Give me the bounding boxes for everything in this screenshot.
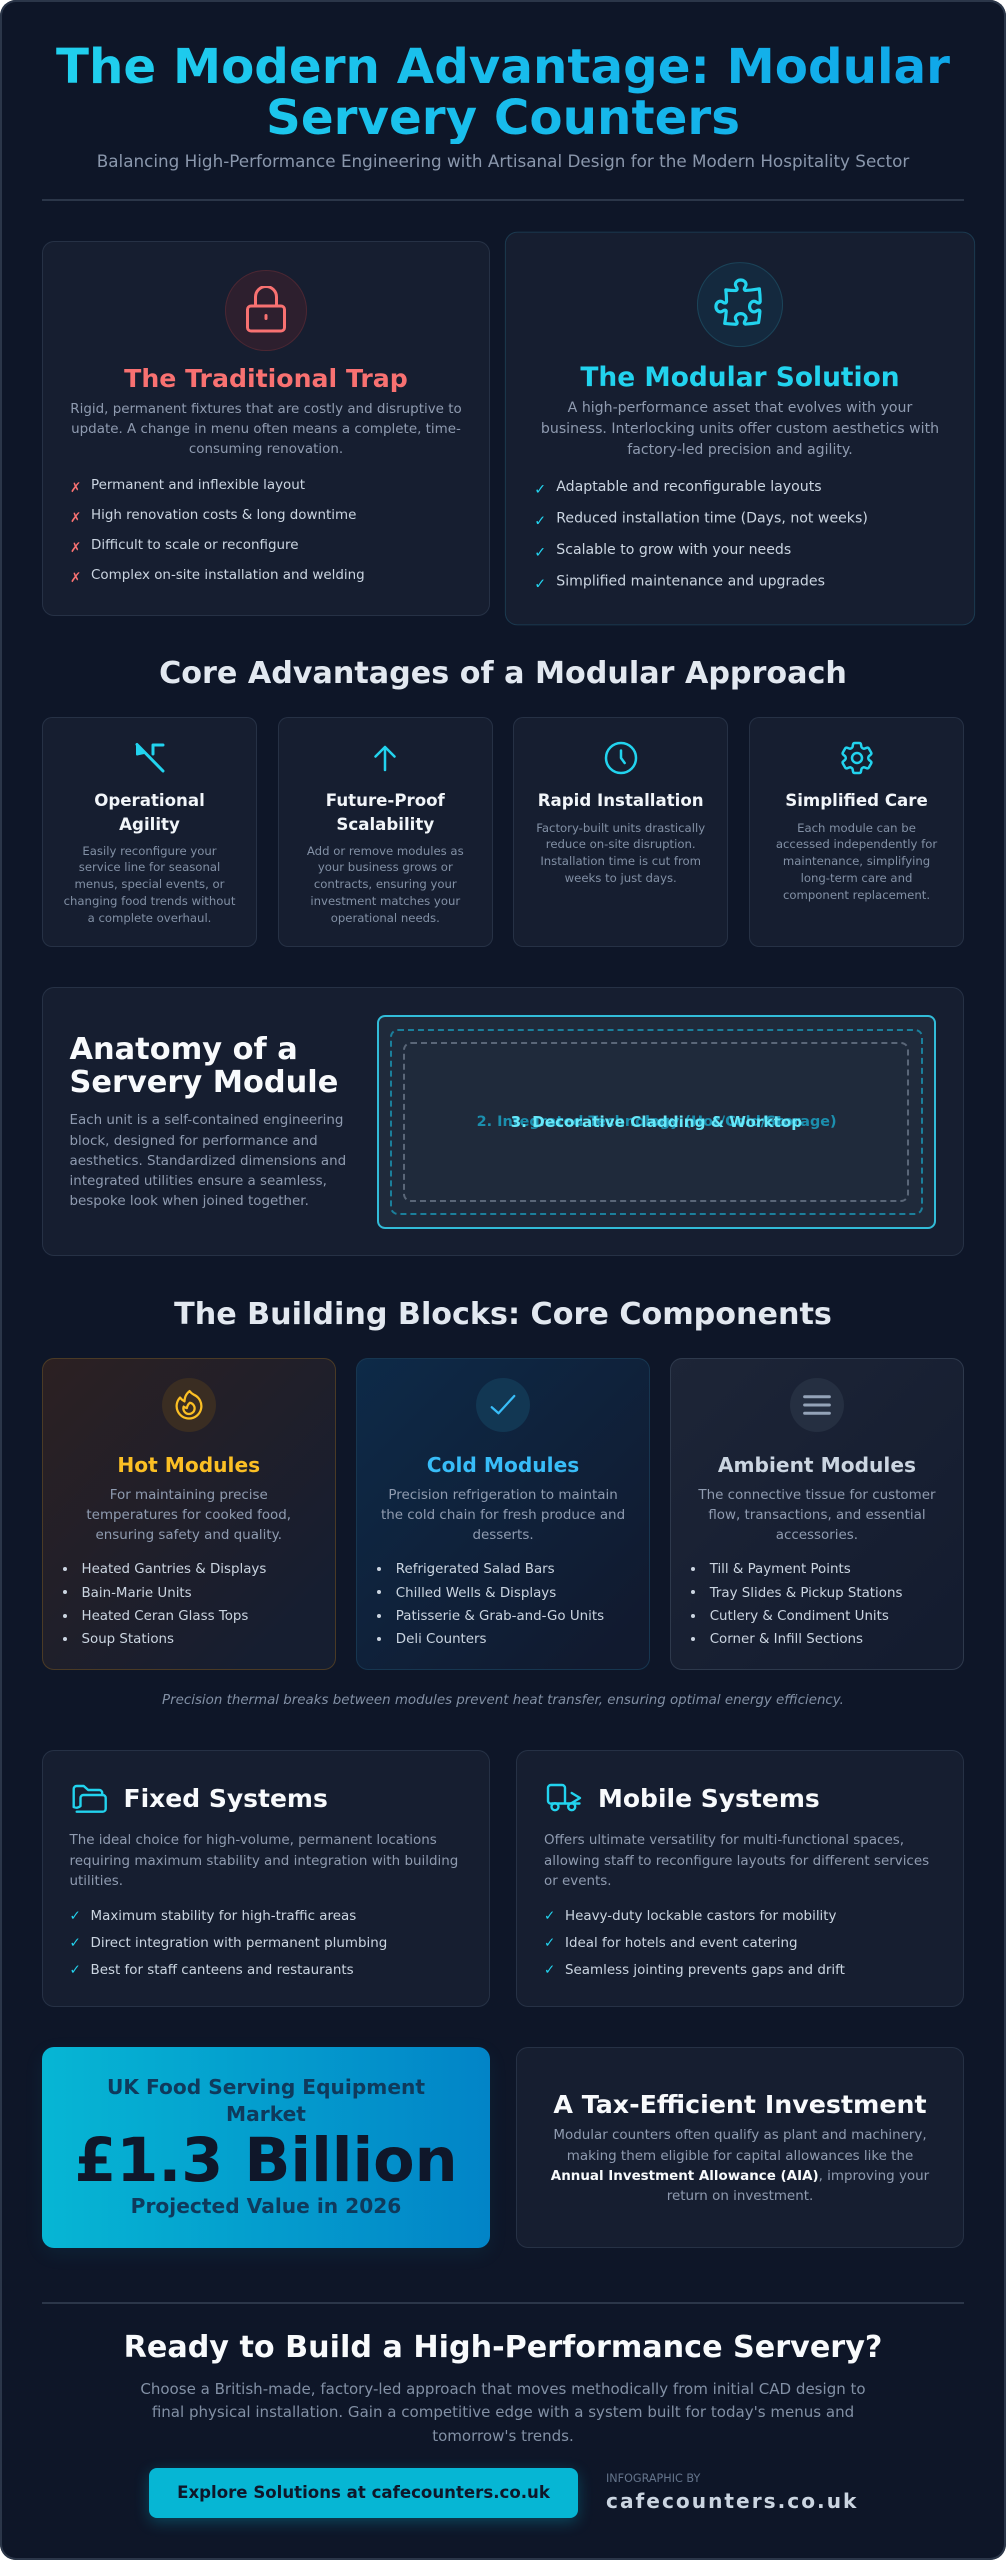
list: benefits: Simplified maintenance and upgrades — [556, 574, 825, 590]
module text: flow, transactions, and essential — [708, 1508, 926, 1523]
card text — [536, 821, 705, 885]
heading: tax: A Tax-Efficient Investment — [553, 2090, 927, 2119]
panel: tax-efficient investment — [516, 2047, 964, 2248]
description — [550, 2128, 930, 2204]
card: cold modules — [356, 1358, 650, 1670]
card: operational agility — [42, 717, 257, 947]
description: requiring maximum stability and integration with building — [70, 1854, 458, 1869]
icon: gear — [841, 742, 873, 774]
module list — [63, 1562, 266, 1647]
title: The Modern Advantage: Modular — [56, 39, 950, 95]
layer: integrated systems — [390, 1029, 923, 1215]
diagram: module layers — [377, 1015, 936, 1229]
stat caption: Projected Value in 2026 — [131, 2194, 401, 2218]
title: Servery Counters — [266, 90, 740, 146]
icon: padlock — [225, 270, 306, 351]
card text: your business grows or — [318, 860, 453, 874]
call to action text — [140, 2380, 866, 2444]
module text — [381, 1488, 625, 1543]
heading: building blocks: The Building Blocks: Core Components — [174, 1297, 832, 1332]
list: benefits: Scalable to grow with your needs — [556, 543, 791, 558]
description: Annual Investment Allowance (AIA), improving your — [551, 2169, 929, 2184]
module title: Ambient Modules — [718, 1453, 916, 1477]
credit name: cafecounters.co.uk — [606, 2488, 858, 2512]
list: fixed benefits: ✓ — [70, 1908, 81, 1924]
card: ambient modules — [670, 1358, 964, 1670]
list: mobile benefits: Ideal for hotels and event catering — [565, 1936, 798, 1951]
description: block, designed for performance and — [70, 1134, 318, 1149]
icon: up arrow — [374, 746, 396, 772]
card title — [94, 791, 205, 834]
list: fixed benefits: Direct integration with permanent plumbing — [90, 1936, 387, 1951]
icon: menu bars — [790, 1378, 844, 1432]
list: mobile benefits: ✓ — [544, 1936, 555, 1951]
module list: Corner & Infill Sections — [710, 1632, 863, 1647]
list: mobile benefits: ✓ — [544, 1908, 555, 1924]
description — [69, 1833, 458, 1889]
module text: the cold chain for fresh produce and — [381, 1508, 625, 1523]
card title: Future-Proof — [326, 791, 445, 810]
card text: reduce on-site disruption. — [546, 837, 696, 851]
card text: menus, special events, or — [75, 877, 224, 891]
card: future-proof scalability — [278, 717, 493, 947]
list: mobile benefits: ✓ — [544, 1963, 555, 1978]
card title: Scalability — [336, 815, 434, 834]
card text: Add or remove modules as — [307, 844, 464, 858]
brand credit — [606, 2472, 858, 2512]
icon: flame — [162, 1378, 216, 1432]
list: mobile benefits: Heavy-duty lockable castors for mobility — [565, 1908, 837, 1924]
description: Rigid, permanent fixtures that are costly and disruptive to — [70, 402, 462, 417]
card text: changing food trends without — [64, 894, 235, 908]
panel: mobile systems — [516, 1750, 964, 2006]
panel: the traditional trap — [42, 241, 490, 616]
heading: the traditional trap: The Traditional Trap — [124, 364, 408, 393]
subtitle: Balancing High-Performance Engineering with Artisanal Design for the Modern Hospitality Sector — [97, 151, 909, 171]
list: benefits: ✓ — [534, 514, 546, 530]
card text: maintenance, simplifying — [783, 854, 930, 868]
stat label: UK Food Serving Equipment — [107, 2075, 425, 2099]
description: aesthetics. Standardized dimensions and — [70, 1154, 346, 1169]
list: fixed benefits: ✓ — [70, 1963, 81, 1978]
title — [0, 42, 1006, 144]
module text: desserts. — [472, 1528, 534, 1543]
heading: anatomy: Anatomy of a — [70, 1032, 298, 1067]
module title: Cold Modules — [427, 1453, 579, 1477]
card text: Each module can be — [797, 821, 916, 835]
list: drawbacks: Permanent and inflexible layout — [91, 478, 305, 493]
card text: Installation time is cut from — [540, 854, 701, 868]
module text: The connective tissue for customer — [698, 1488, 936, 1503]
list: benefits: Reduced installation time (Days, not weeks) — [556, 511, 868, 527]
note: thermal breaks: Precision thermal breaks between modules prevent heat transfer, ensuring optimal energy efficiency. — [162, 1692, 844, 1708]
stat value: £1.3 Billion — [74, 2126, 458, 2196]
card title: Operational — [94, 791, 205, 810]
module list: Chilled Wells & Displays — [396, 1586, 556, 1601]
icon: check — [476, 1378, 530, 1432]
description: update. A change in menu often means a complete, time- — [71, 422, 461, 437]
heading: anatomy: Servery Module — [70, 1065, 338, 1100]
card text: Factory-built units drastically — [536, 821, 705, 835]
module list: Heated Gantries & Displays — [82, 1562, 266, 1577]
module list: Tray Slides & Pickup Stations — [710, 1586, 902, 1601]
module text: accessories. — [776, 1528, 858, 1543]
card text: contracts, ensuring your — [314, 877, 457, 891]
module title: Hot Modules — [117, 1453, 260, 1477]
description: business. Interlocking units offer custom aesthetics with — [541, 422, 939, 437]
icon: wheeled truck — [546, 1784, 582, 1812]
description — [70, 402, 462, 457]
description: Each unit is a self-contained engineering — [70, 1113, 343, 1128]
module text — [86, 1488, 291, 1543]
list: fixed benefits — [70, 1908, 387, 1978]
call to action text: Choose a British-made, factory-led approach that moves methodically from initial CAD design to — [140, 2380, 866, 2398]
call to action text: final physical installation. Gain a competitive edge with a system built for today's menus and — [152, 2403, 854, 2421]
module list: Refrigerated Salad Bars — [396, 1562, 555, 1577]
call to action text: tomorrow's trends. — [432, 2426, 574, 2444]
description — [70, 1113, 346, 1209]
stat label: Market — [226, 2102, 306, 2126]
credit label: INFOGRAPHIC BY — [606, 2472, 700, 2485]
card text — [307, 844, 464, 925]
description: making them eligible for capital allowances like the — [567, 2148, 913, 2164]
description — [541, 400, 939, 459]
stat card: market value — [42, 2047, 490, 2248]
module list: Cutlery & Condiment Units — [710, 1609, 889, 1624]
list: drawbacks: ✗ — [70, 481, 81, 496]
panel: fixed systems — [42, 1750, 490, 2006]
card: hot modules — [42, 1358, 336, 1670]
list: fixed benefits: Best for staff canteens and restaurants — [90, 1963, 354, 1978]
list: drawbacks: Difficult to scale or reconfigure — [91, 538, 299, 553]
module list — [691, 1562, 902, 1647]
list: drawbacks: ✗ — [70, 571, 81, 586]
card text: investment matches your — [310, 894, 460, 908]
list: benefits: Adaptable and reconfigurable layouts — [556, 479, 822, 495]
module list: Till & Payment Points — [710, 1562, 851, 1577]
label: layer 2: 2. Integrated Technology (Hot/Cold/Storage) — [477, 1114, 837, 1130]
list: benefits: ✓ — [534, 546, 546, 562]
list: drawbacks: Complex on-site installation and welding — [91, 568, 365, 583]
button: explore solutions: Explore Solutions at cafecounters.co.uk — [177, 2483, 550, 2502]
card text: component replacement. — [783, 888, 930, 902]
heading: the modular solution: The Modular Solution — [580, 361, 900, 392]
description: utilities. — [70, 1874, 123, 1889]
heading: core advantages: Core Advantages of a Modular Approach — [159, 656, 847, 691]
card title: Rapid Installation — [538, 791, 704, 810]
icon: puzzle piece — [697, 262, 783, 347]
card text: long-term care and — [801, 871, 912, 885]
module list: Bain-Marie Units — [82, 1586, 192, 1601]
list: benefits — [534, 479, 868, 593]
card text — [64, 844, 236, 925]
description: A high-performance asset that evolves with your — [568, 400, 912, 416]
description: The ideal choice for high-volume, permanent locations — [70, 1833, 437, 1848]
description: or events. — [544, 1874, 612, 1889]
list: fixed benefits: ✓ — [70, 1936, 81, 1951]
card text: a complete overhaul. — [88, 911, 211, 925]
description: integrated utilities ensure a seamless, — [70, 1174, 327, 1189]
card title — [326, 791, 445, 834]
module text — [698, 1488, 936, 1543]
card: simplified care — [749, 717, 964, 947]
description: factory-led precision and agility. — [627, 443, 853, 459]
list: benefits: ✓ — [534, 482, 546, 498]
list: drawbacks: ✗ — [70, 511, 81, 526]
panel: anatomy of a servery module — [42, 987, 964, 1256]
description — [544, 1833, 929, 1889]
description: Modular counters often qualify as plant and machinery, — [553, 2128, 927, 2143]
heading: mobile systems: Mobile Systems — [598, 1784, 820, 1812]
button: explore solutions — [149, 2468, 578, 2518]
description: bespoke look when joined together. — [70, 1194, 309, 1209]
card text: weeks to just days. — [565, 871, 677, 885]
heading: fixed systems: Fixed Systems — [124, 1784, 328, 1812]
module list: Patisserie & Grab-and-Go Units — [396, 1609, 604, 1624]
card: rapid installation — [513, 717, 728, 947]
stat label — [107, 2075, 425, 2126]
heading: anatomy — [70, 1032, 338, 1100]
description: return on investment. — [667, 2189, 813, 2204]
card text: operational needs. — [331, 911, 440, 925]
module text: For maintaining precise — [110, 1488, 268, 1503]
card title: Agility — [119, 815, 180, 834]
layer: decorative cladding — [403, 1042, 909, 1202]
icon: clock — [604, 742, 638, 774]
module text: ensuring safety and quality. — [96, 1528, 282, 1543]
module text: Precision refrigeration to maintain — [388, 1488, 618, 1503]
list: benefits: ✓ — [534, 577, 546, 593]
module list — [377, 1562, 604, 1647]
card title: Simplified Care — [785, 791, 928, 810]
description: Offers ultimate versatility for multi-functional spaces, — [544, 1833, 904, 1848]
card text: accessed independently for — [776, 837, 937, 851]
panel: the modular solution — [505, 232, 975, 625]
list: mobile benefits: Seamless jointing prevents gaps and drift — [565, 1963, 845, 1978]
list: drawbacks — [70, 478, 365, 586]
description: allowing staff to reconfigure layouts for different services — [544, 1854, 929, 1869]
module text: temperatures for cooked food, — [86, 1508, 291, 1523]
label: layer 3: 3. Decorative Cladding & Worktop — [511, 1113, 802, 1131]
card text — [776, 821, 938, 902]
card text: service line for seasonal — [79, 860, 220, 874]
list: fixed benefits: Maximum stability for high-traffic areas — [90, 1908, 356, 1924]
icon: expand tool — [135, 742, 164, 773]
heading: call to action: Ready to Build a High-Performance Servery? — [124, 2330, 882, 2364]
card text: Easily reconfigure your — [82, 844, 217, 858]
icon: folder — [72, 1784, 107, 1813]
list: drawbacks: High renovation costs & long downtime — [91, 508, 356, 523]
list: mobile benefits — [544, 1908, 845, 1978]
description: consuming renovation. — [189, 442, 343, 457]
module list: Deli Counters — [396, 1632, 487, 1647]
module list: Soup Stations — [82, 1632, 174, 1647]
list: drawbacks: ✗ — [70, 541, 81, 556]
module list: Heated Ceran Glass Tops — [82, 1609, 248, 1624]
